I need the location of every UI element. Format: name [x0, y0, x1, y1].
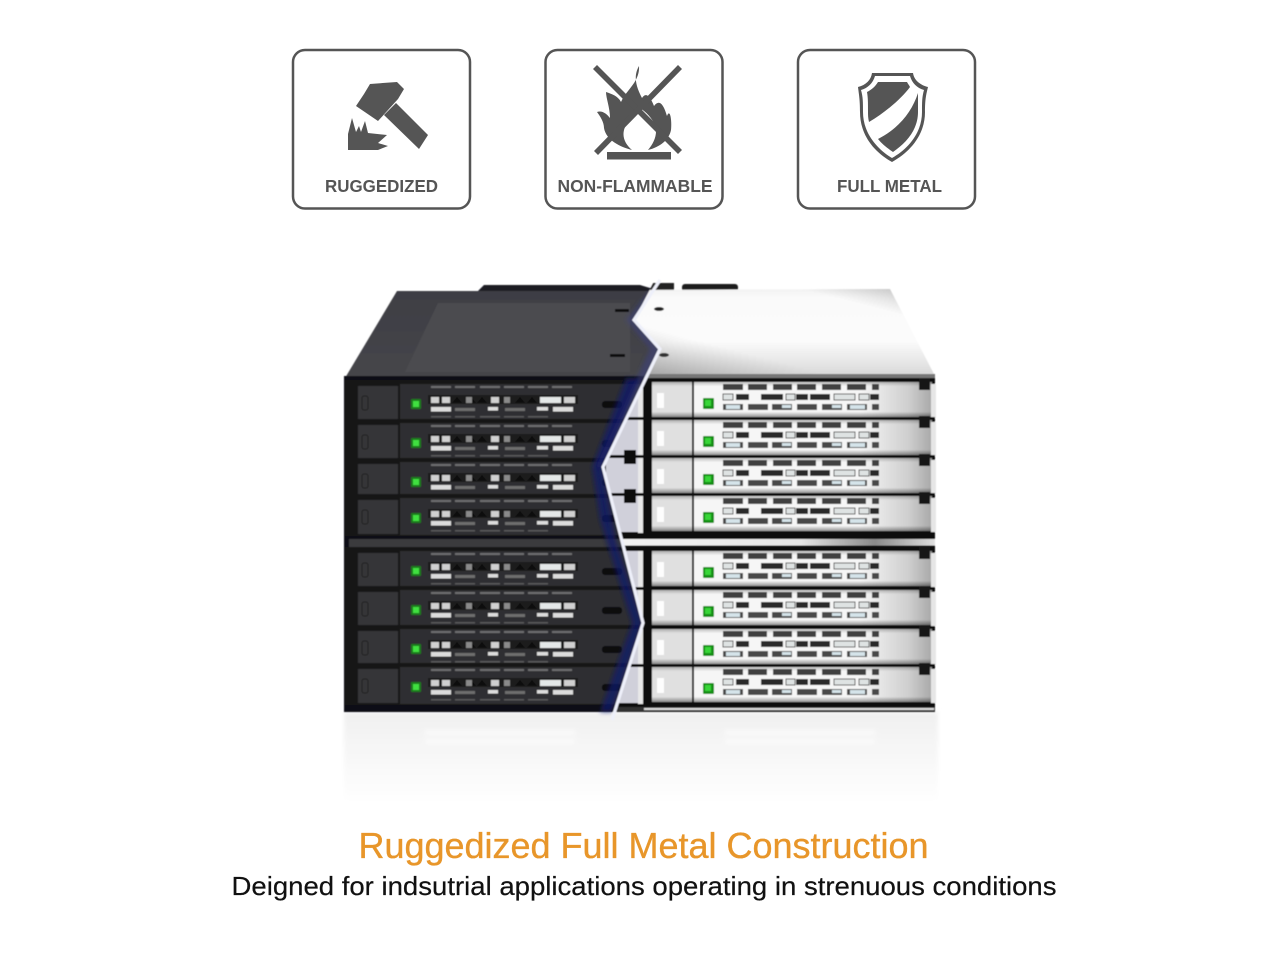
- product: drive enclosure: [344, 280, 936, 720]
- subheading: Deigned for indsutrial applications operating in strenuous conditions: [232, 871, 1056, 901]
- label: non-flammable: NON-FLAMMABLE: [558, 176, 712, 196]
- panel: full metal badge: [798, 50, 975, 208]
- zigzag divider line: [603, 280, 660, 720]
- label: rugged: RUGGEDIZED: [325, 176, 438, 196]
- icon: crossed flame: [593, 65, 682, 160]
- dark drive bays: [345, 380, 640, 705]
- heading: Ruggedized Full Metal Construction: [358, 825, 928, 866]
- icon: hammer: [348, 82, 428, 150]
- reflection under enclosure: [344, 712, 938, 804]
- dark half of enclosure: [344, 285, 660, 712]
- silver drive bays: [600, 378, 936, 706]
- panel: rugged badge: [293, 50, 470, 208]
- panel: non-flammable badge: [546, 50, 722, 208]
- icon: shield: [858, 73, 928, 162]
- silver half of enclosure: [600, 283, 936, 712]
- blue edge shading: [592, 285, 660, 712]
- label: full metal: FULL METAL: [837, 176, 942, 196]
